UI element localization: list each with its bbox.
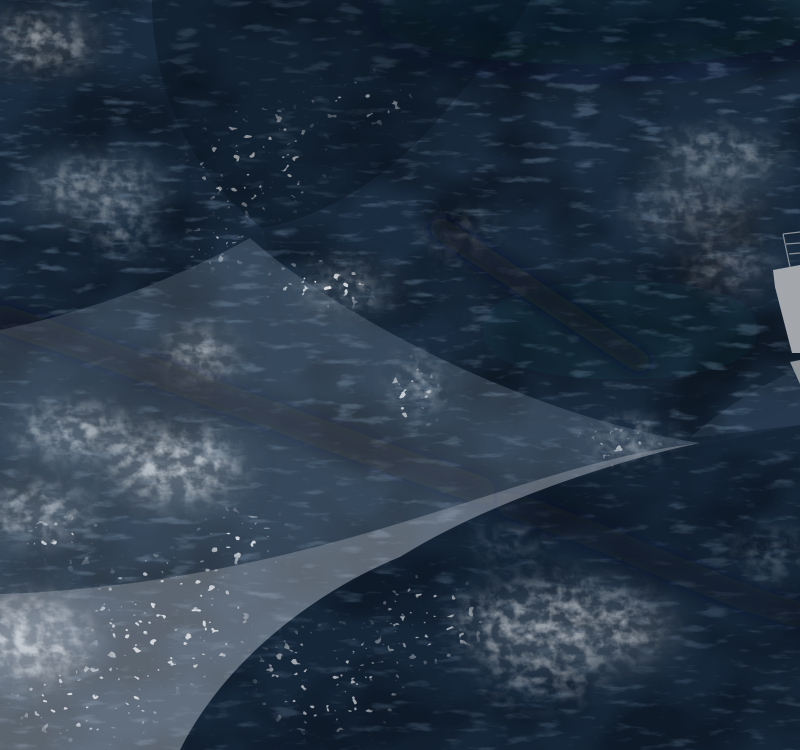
small foam flecks xyxy=(20,80,660,735)
dark upper sea shading xyxy=(360,0,800,380)
translucent lens, centre left xyxy=(0,238,700,594)
faint tint, right of lens tip xyxy=(690,368,800,438)
boat lower hull xyxy=(790,360,800,384)
boat railing xyxy=(783,232,800,267)
boat hull xyxy=(773,265,800,353)
boat xyxy=(773,232,800,384)
dark circle overlay, top xyxy=(152,0,530,228)
dark circle overlay, lower right xyxy=(180,425,800,750)
pale wedge, lower left xyxy=(0,443,700,750)
dark diagonal streaks xyxy=(0,228,800,615)
